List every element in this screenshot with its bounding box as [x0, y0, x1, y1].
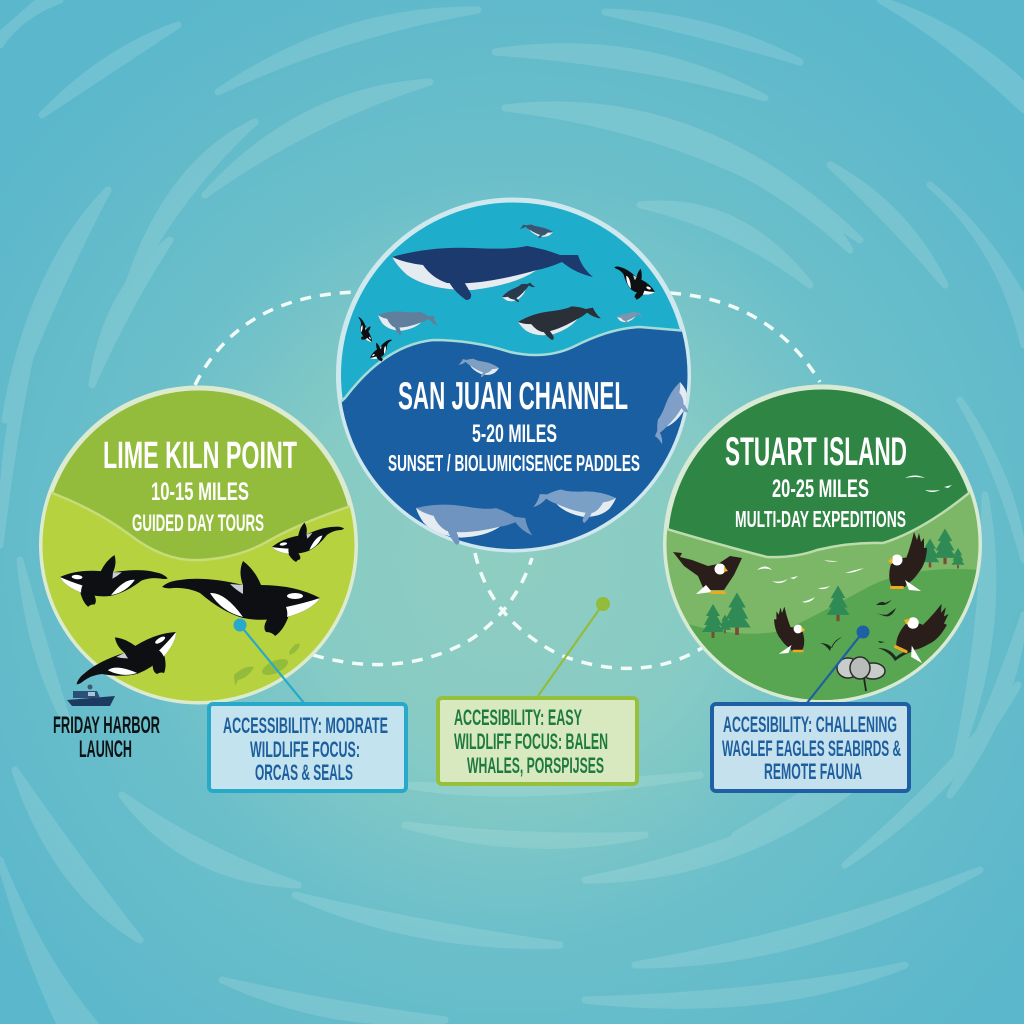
distance: 5-20 MILES [472, 420, 557, 448]
launch label: LAUNCH [79, 736, 132, 763]
eagle upper right [888, 532, 927, 591]
callout: San Juan details: WILDLIFF FOCUS: BALEN [454, 729, 608, 754]
eagle middle [774, 607, 805, 654]
callout: Stuart Island leader line [807, 626, 870, 703]
whales [350, 222, 698, 552]
title: LIME KILN POINT [103, 435, 297, 477]
trees [702, 528, 965, 638]
callout: Stuart Island details [712, 704, 909, 791]
launch label: FRIDAY HARBOR [53, 712, 160, 739]
orca lower [66, 608, 191, 716]
upper hill [666, 491, 978, 700]
title: SAN JUAN CHANNEL [398, 375, 628, 418]
launch label [53, 712, 160, 763]
callout: Lime Kiln details: WILDLIFE FOCUS: [250, 737, 360, 762]
orca upper right [269, 516, 348, 566]
wave lower section [42, 492, 354, 701]
circle base [338, 200, 688, 550]
dashed route lines [195, 292, 820, 668]
callout: San Juan leader line [538, 597, 610, 696]
callout: San Juan details: WHALES, PORSPIJSES [467, 753, 604, 778]
callout: Stuart Island details: REMOTE FAUNA [764, 759, 862, 784]
faint seals [234, 644, 300, 686]
callout: San Juan details [438, 698, 637, 784]
circle base [666, 387, 980, 701]
callout: Lime Kiln leader line [234, 618, 304, 703]
eagle lower right [891, 592, 954, 666]
tour type: GUIDED DAY TOURS [132, 510, 264, 537]
white birds [757, 476, 952, 602]
dark birds [820, 600, 914, 661]
tour type: SUNSET / BIOLUMICISENCE PADDLES [388, 450, 640, 476]
tour type: MULTI-DAY EXPEDITIONS [735, 506, 906, 532]
panel: San Juan Channel [336, 198, 691, 552]
orca large [162, 561, 320, 636]
orca upper left [58, 550, 169, 614]
seabird rock [837, 657, 885, 691]
callout: Stuart Island details: ACCESIBILITY: CHALLENING [723, 712, 897, 737]
callout: Lime Kiln details: ACCESSIBILITY: MODRATE [223, 713, 388, 738]
callout: Lime Kiln details: ORCAS & SEALS [255, 760, 353, 785]
eagle spread wings [673, 552, 742, 594]
deep water section [341, 326, 688, 549]
distance: 10-15 MILES [151, 478, 249, 506]
circle base [42, 388, 356, 702]
panel: Stuart Island [663, 384, 982, 702]
panel: Lime Kiln Point [39, 386, 358, 704]
lower hill [688, 569, 976, 700]
callout: Lime Kiln details [209, 704, 406, 791]
distance: 20-25 MILES [772, 475, 869, 503]
callout: San Juan details: ACCESIBILITY: EASY [454, 705, 582, 730]
icon: boat [67, 684, 115, 706]
